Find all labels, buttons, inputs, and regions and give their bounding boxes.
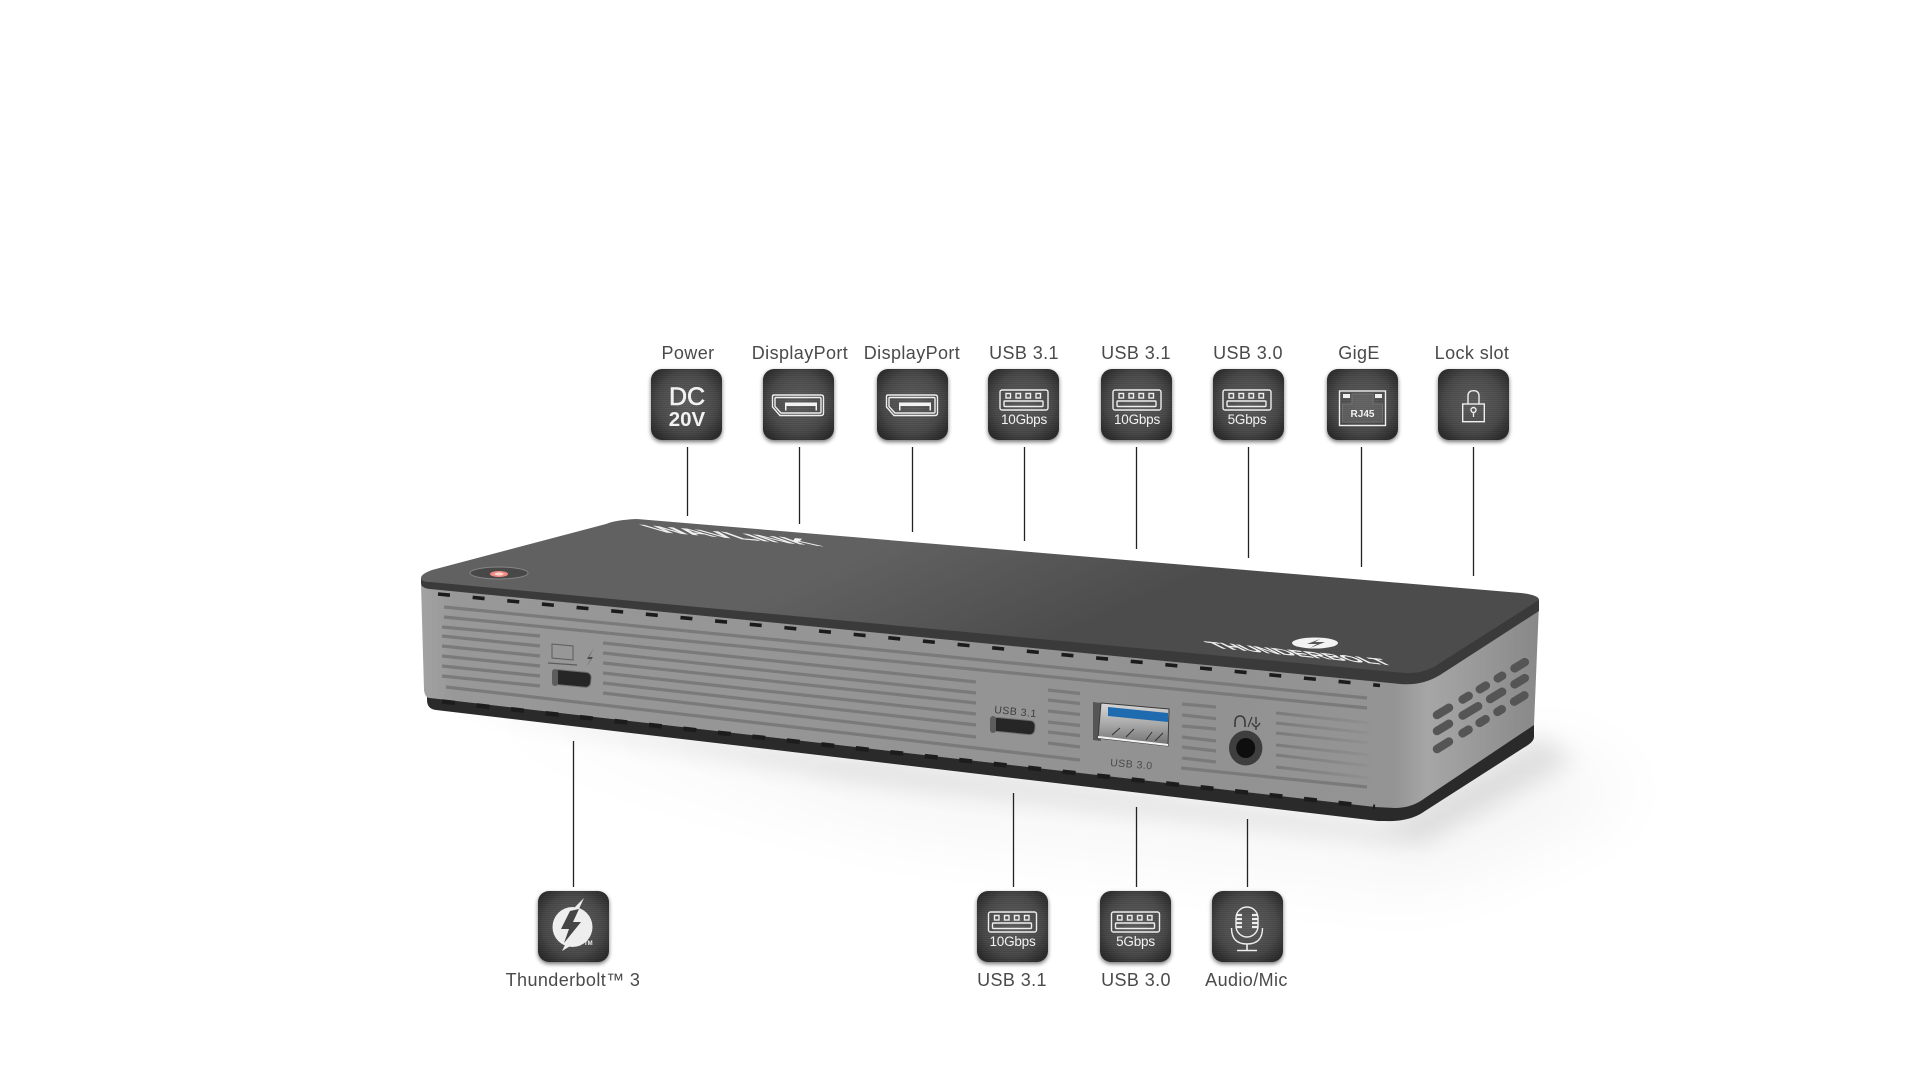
icon: padlock <box>1438 369 1509 440</box>
label: USB 3.1: USB 3.1 <box>1101 343 1171 363</box>
connector lines <box>574 447 1474 887</box>
icon: microphone <box>1212 891 1283 962</box>
WAVLINK logo: WAVLINK <box>634 522 831 549</box>
icon: USB 10Gbps <box>988 369 1059 440</box>
docking station device <box>421 519 1539 821</box>
icon: USB 10Gbps <box>977 891 1048 962</box>
icon: DisplayPort <box>763 369 834 440</box>
aluminium body <box>421 584 1539 808</box>
icon: DC 20V <box>651 369 722 440</box>
icon: DisplayPort <box>877 369 948 440</box>
USB 3.0 port: USB 3.0 <box>1110 758 1153 772</box>
label: USB 3.0: USB 3.0 <box>1101 970 1171 990</box>
icon: RJ45 <box>1327 369 1398 440</box>
USB 3.0 port <box>1093 702 1169 772</box>
label: USB 3.1: USB 3.1 <box>977 970 1047 990</box>
icon: USB 10Gbps: 10Gbps <box>989 934 1036 949</box>
label: DisplayPort: DisplayPort <box>864 343 960 363</box>
label: Thunderbolt 3: Thunderbolt™ 3 <box>506 970 640 990</box>
label: Audio/Mic: Audio/Mic <box>1205 970 1288 990</box>
label: Lock slot: Lock slot <box>1435 343 1509 363</box>
top plate <box>421 519 1539 673</box>
icon: USB 10Gbps: 10Gbps <box>1114 412 1160 427</box>
icon: USB 10Gbps: 10Gbps <box>1001 412 1047 427</box>
icon: USB 5Gbps: 5Gbps <box>1228 412 1267 427</box>
icon: USB 5Gbps <box>1213 369 1284 440</box>
Thunderbolt port <box>548 644 594 688</box>
icon: DC 20V: 20V <box>669 408 706 431</box>
icon: DC 20V: DC <box>669 383 705 411</box>
label: Power: Power <box>661 343 715 363</box>
audio jack <box>1229 716 1262 766</box>
icon: RJ45: RJ45 <box>1351 409 1375 420</box>
power button <box>470 567 528 579</box>
bottom base band <box>427 697 1534 821</box>
Thunderbolt logo: THUNDERBOLT <box>1199 639 1399 668</box>
USB 3.1 port: USB 3.1 <box>994 704 1037 720</box>
label: USB 3.0: USB 3.0 <box>1213 343 1283 363</box>
label: GigE: GigE <box>1338 343 1380 363</box>
USB 3.1 port <box>990 704 1037 735</box>
bottom notches <box>442 702 1375 807</box>
label: DisplayPort: DisplayPort <box>752 343 848 363</box>
icon: USB 5Gbps <box>1100 891 1171 962</box>
label: USB 3.1: USB 3.1 <box>989 343 1059 363</box>
icon: USB 5Gbps: 5Gbps <box>1116 934 1155 949</box>
device shadow <box>440 705 1640 880</box>
icon: USB 10Gbps <box>1101 369 1172 440</box>
front vent slots <box>442 607 1369 787</box>
plate edge <box>421 578 1539 684</box>
top notches <box>438 594 1380 686</box>
icon: Thunderbolt: TM <box>584 941 593 947</box>
icon: Thunderbolt <box>538 891 609 962</box>
side vents <box>1437 662 1525 749</box>
